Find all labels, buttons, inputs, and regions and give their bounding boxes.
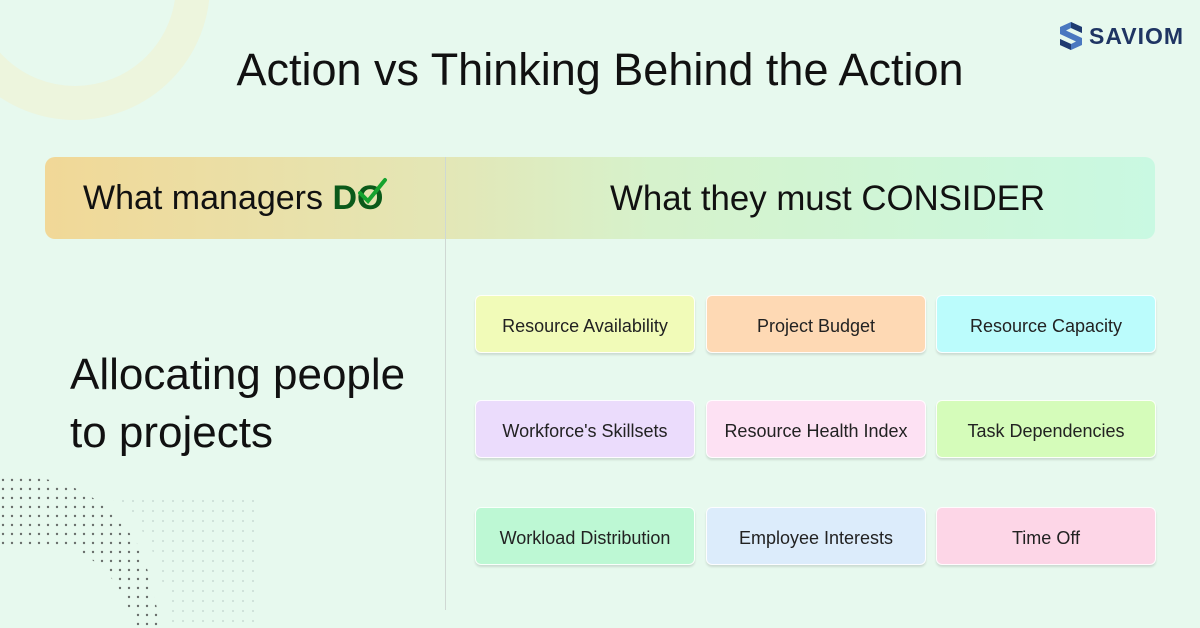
title: Action vs Thinking Behind the Action <box>236 44 964 95</box>
card: resource health index <box>706 400 926 458</box>
card: workload distribution: Workload Distribution <box>500 528 670 548</box>
card: resource availability: Resource Availability <box>502 316 668 336</box>
text: allocating people to projects: to projects <box>70 408 273 457</box>
cards grid <box>474 295 1156 568</box>
heading: what managers do: What managers DO <box>83 179 383 217</box>
header bar <box>45 157 1155 239</box>
card: time off: Time Off <box>1012 528 1080 548</box>
card: workforce skillsets <box>475 400 695 458</box>
card: resource capacity: Resource Capacity <box>970 316 1122 336</box>
card: resource health index: Resource Health Index <box>724 421 908 441</box>
card: time off <box>936 507 1156 565</box>
card: employee interests <box>706 507 926 565</box>
card: workforce skillsets: Workforce's Skillsets <box>502 421 668 441</box>
card: resource capacity <box>936 295 1156 353</box>
card: employee interests: Employee Interests <box>739 528 893 548</box>
card: task dependencies: Task Dependencies <box>967 421 1125 441</box>
divider <box>445 157 446 610</box>
icon: logo mark <box>1060 22 1082 50</box>
heading: what they must consider: What they must CONSIDER <box>610 179 1045 218</box>
card: project budget <box>706 295 926 353</box>
card: workload distribution <box>475 507 695 565</box>
card: project budget: Project Budget <box>757 316 875 336</box>
text: allocating people to projects: Allocating people <box>70 350 405 399</box>
decorative ring top-left <box>0 0 210 120</box>
card: task dependencies <box>936 400 1156 458</box>
text: allocating people to projects <box>70 350 405 457</box>
card: resource availability <box>475 295 695 353</box>
decorative dot pattern <box>2 478 254 626</box>
logo: SAVIOM <box>1089 22 1184 48</box>
